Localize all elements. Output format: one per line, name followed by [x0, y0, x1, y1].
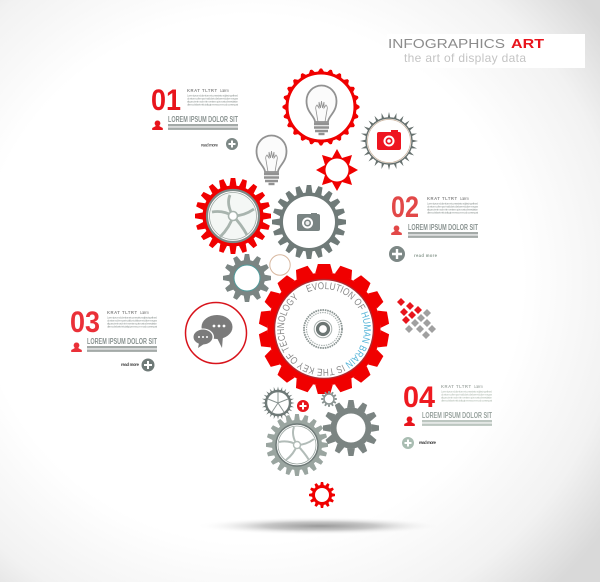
block 04: LOREM IPSUM DOLOR SIT: [422, 411, 492, 420]
banner title: [387, 34, 585, 68]
block 01: [151, 84, 238, 150]
block 03: do eiusmod tempor incididunt ut labore et dolore magna: [107, 318, 157, 322]
block 01: Lorem ipsum dolor sit amet consectetur adipiscing elit sed: [187, 94, 238, 98]
gear: small wheel: [262, 386, 294, 420]
gear: camera ring: [360, 112, 418, 170]
block 01: KRAT TLTRT: [187, 88, 217, 93]
gear: top red ring with bulb: [282, 68, 360, 146]
block 04: read more: [419, 440, 437, 445]
block 02: 02: [391, 191, 419, 224]
block 03: read more: [121, 362, 140, 367]
red plus button: [297, 400, 309, 412]
block 02: Lorem: [460, 196, 470, 201]
block 04: Lorem ipsum dolor sit amet consectetur adipiscing elit sed: [441, 390, 492, 394]
block 03: KRAT TLTRT: [107, 310, 137, 315]
block 02: [389, 191, 478, 262]
block 03: Lorem ipsum dolor sit amet consectetur adipiscing elit sed: [107, 316, 157, 320]
block 02: KRAT TLTRT: [427, 196, 457, 201]
banner title: the art of display data: [404, 51, 526, 65]
chat icon circle: [186, 302, 246, 364]
block 01: ullamco laboris nisi ut aliquip ex ea commodo consequat: [187, 102, 238, 106]
centre hub: [304, 310, 342, 348]
gear: dark grey: [323, 400, 379, 456]
gear: small grey: [223, 254, 271, 302]
block 04: KRAT TLTRT: [441, 384, 471, 389]
block 02: do eiusmod tempor incididunt ut labore et dolore magna: [427, 204, 478, 208]
icon: speech bubbles: [192, 315, 232, 348]
gear: grey with camera: [272, 185, 346, 259]
block 01: 01: [151, 84, 181, 117]
ring text: EVOLUTION OF HUMAN BRAIN IS THE KEY OF TECHNOLOGY: [277, 282, 371, 376]
block 03: 03: [70, 306, 100, 339]
block 02: ullamco laboris nisi ut aliquip ex ea commodo consequat: [427, 210, 478, 214]
block 01: aliqua ut enim ad minim veniam quis nostrud exercitation: [187, 100, 238, 104]
block 03: Lorem: [140, 310, 150, 315]
block 01: read more: [201, 142, 219, 148]
floor shadow: [195, 517, 445, 535]
gear: big red with ring text: [258, 264, 390, 394]
block 01: Lorem: [220, 88, 230, 93]
diamonds: [397, 298, 436, 339]
thin ring: [270, 255, 290, 275]
block 03: ullamco laboris nisi ut aliquip ex ea commodo consequat: [107, 324, 157, 328]
gear: red with wheel: [195, 178, 271, 254]
icon: light bulb: [306, 86, 336, 134]
block 04: [402, 381, 492, 449]
block 02: read more: [414, 253, 438, 258]
banner title: ART: [511, 36, 544, 51]
block 02: Lorem ipsum dolor sit amet consectetur adipiscing elit sed: [427, 202, 478, 206]
block 03: LOREM IPSUM DOLOR SIT: [87, 337, 157, 346]
icon: red camera: [377, 130, 401, 150]
block 03: aliqua ut enim ad minim veniam quis nostrud exercitation: [107, 322, 157, 326]
block 01: LOREM IPSUM DOLOR SIT: [168, 115, 238, 124]
gear: small red: [309, 482, 335, 508]
block 04: Lorem: [474, 384, 484, 389]
icon: second light bulb: [256, 136, 286, 184]
block 01: do eiusmod tempor incididunt ut labore et dolore magna: [187, 96, 238, 100]
gear: silver with wheel: [266, 414, 328, 476]
block 02: LOREM IPSUM DOLOR SIT: [408, 223, 478, 232]
block 04: ullamco laboris nisi ut aliquip ex ea commodo consequat: [441, 398, 492, 402]
block 04: 04: [403, 381, 435, 414]
banner title: INFOGRAPHICS: [388, 36, 505, 51]
wheel spokes: [212, 195, 254, 237]
block 02: aliqua ut enim ad minim veniam quis nostrud exercitation: [427, 208, 478, 212]
icon: grey camera: [297, 213, 320, 231]
red star: [316, 149, 358, 191]
wheel spokes: [279, 427, 314, 460]
gear: tiny: [321, 391, 337, 407]
block 04: aliqua ut enim ad minim veniam quis nostrud exercitation: [441, 396, 492, 400]
block 04: do eiusmod tempor incididunt ut labore et dolore magna: [441, 392, 492, 396]
block 03: [70, 306, 157, 372]
